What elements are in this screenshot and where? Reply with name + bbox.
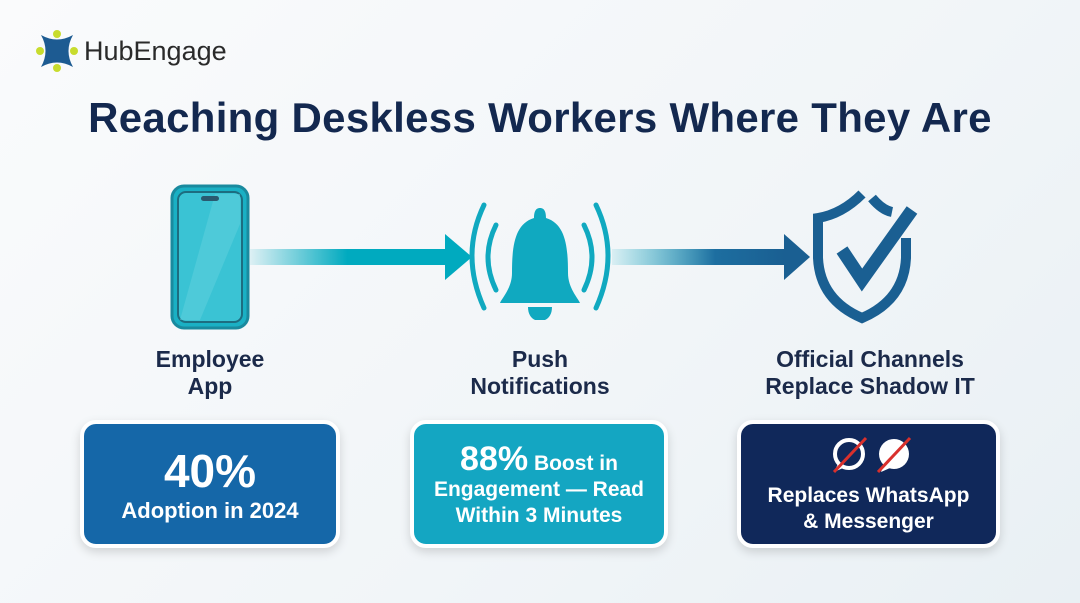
box: 40% adoption: 40% bbox=[164, 445, 256, 497]
icon: shield bbox=[813, 190, 918, 324]
label: official channels bbox=[765, 346, 975, 399]
arrow 2 bbox=[612, 234, 810, 280]
label: employee app: App bbox=[188, 373, 232, 399]
arrow 1 bbox=[250, 234, 470, 280]
label: push notifications: Notifications bbox=[470, 373, 610, 399]
icon: phone bbox=[170, 184, 250, 330]
box: replaces whatsapp bbox=[737, 420, 1000, 548]
icons: crossed apps bbox=[833, 437, 911, 473]
box: replaces whatsapp: Replaces WhatsApp bbox=[768, 484, 969, 507]
label: official channels: Official Channels bbox=[776, 346, 964, 372]
label: employee app: Employee bbox=[156, 346, 264, 372]
logo: HubEngage bbox=[84, 36, 227, 66]
box: 88% boost: 88% Boost in bbox=[460, 440, 618, 478]
box: 40% adoption: Adoption in 2024 bbox=[121, 498, 299, 523]
box: 88% boost bbox=[410, 420, 668, 548]
label: push notifications bbox=[470, 346, 610, 399]
logo bbox=[36, 30, 227, 72]
box: replaces whatsapp: & Messenger bbox=[803, 510, 934, 533]
title: Reaching Deskless Workers Where They Are bbox=[88, 94, 992, 141]
label: official channels: Replace Shadow IT bbox=[765, 373, 975, 399]
label: push notifications: Push bbox=[512, 346, 568, 372]
box: 88% boost: Within 3 Minutes bbox=[456, 504, 622, 527]
box: 88% boost: Engagement — Read bbox=[434, 478, 644, 501]
box: 40% adoption bbox=[80, 420, 340, 548]
label: employee app bbox=[156, 346, 264, 399]
icon: bell bbox=[470, 202, 610, 320]
